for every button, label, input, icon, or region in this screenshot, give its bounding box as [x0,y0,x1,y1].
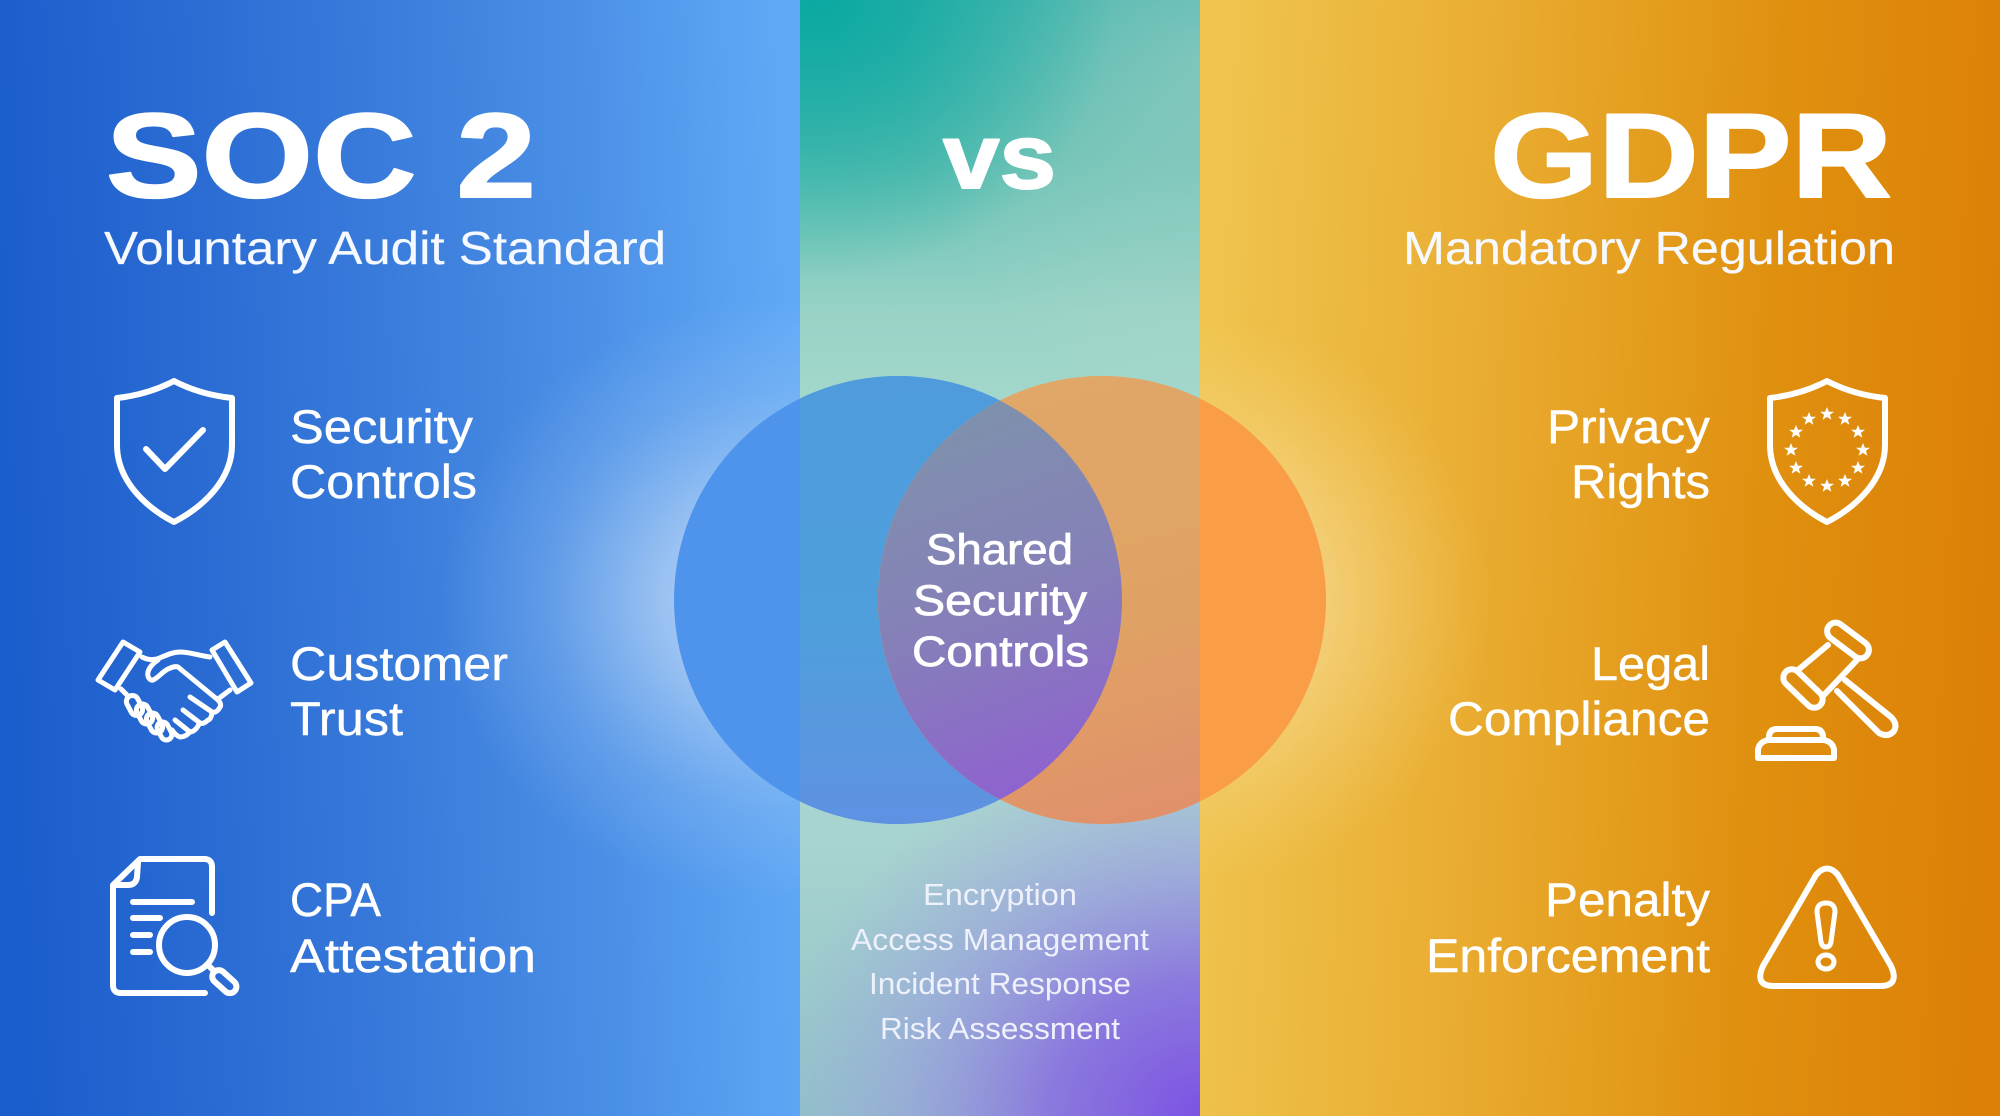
panel: center teal-purple background [800,0,1200,1116]
icon: handshake [98,642,251,742]
label: Penalty Enforcement: Penalty [1545,873,1711,926]
label: Privacy Rights: Privacy [1547,400,1711,453]
subtitle: Mandatory Regulation: Mandatory Regulation [1403,222,1895,274]
icon: warning triangle [1760,868,1894,986]
label: Privacy Rights [1547,400,1711,508]
list: shared controls: Risk Assessment [880,1011,1120,1046]
label: Customer Trust [290,637,508,745]
list: shared controls: Incident Response [869,966,1131,1001]
label: Legal Compliance: Compliance [1448,692,1710,745]
label: Shared Security Controls: Security [913,577,1088,625]
subtitle: Voluntary Audit Standard: Voluntary Audit Standard [104,222,666,274]
venn circle: SOC 2 [674,376,1000,824]
label: Legal Compliance [1448,637,1710,745]
icon: shield with EU stars [1770,381,1885,522]
icon: document with magnifier [113,859,239,996]
list: shared controls: Encryption [923,877,1077,912]
venn overlap [878,400,1122,800]
label: Penalty Enforcement [1426,873,1711,982]
label: Privacy Rights: Rights [1571,455,1710,508]
label: Penalty Enforcement: Enforcement [1426,929,1710,982]
icon: gavel [1758,619,1895,758]
label: Shared Security Controls: Controls [912,628,1089,676]
label: Customer Trust: Trust [290,692,403,745]
label: Shared Security Controls: Shared [926,526,1073,574]
icon: shield with check [117,381,232,522]
label: CPA Attestation: Attestation [290,929,536,982]
label: Security Controls: Security [290,400,474,453]
label: CPA Attestation [290,873,536,982]
label: Customer Trust: Customer [290,637,508,690]
heading: vs: vs [943,106,1056,208]
list: shared controls [851,877,1149,1046]
panel: GDPR orange background [1200,0,2000,1116]
label: CPA Attestation: CPA [290,873,382,926]
venn diagram [674,376,1326,824]
label: Security Controls [290,400,477,508]
list: shared controls: Access Management [851,922,1149,957]
title: GDPR: GDPR [1490,89,1892,223]
label: Legal Compliance: Legal [1591,637,1710,690]
venn circle: GDPR [878,376,1326,824]
title: SOC 2: SOC 2 [106,89,536,223]
label: Shared Security Controls [912,526,1089,676]
label: Security Controls: Controls [290,455,477,508]
panel: SOC 2 blue background [0,0,800,1116]
